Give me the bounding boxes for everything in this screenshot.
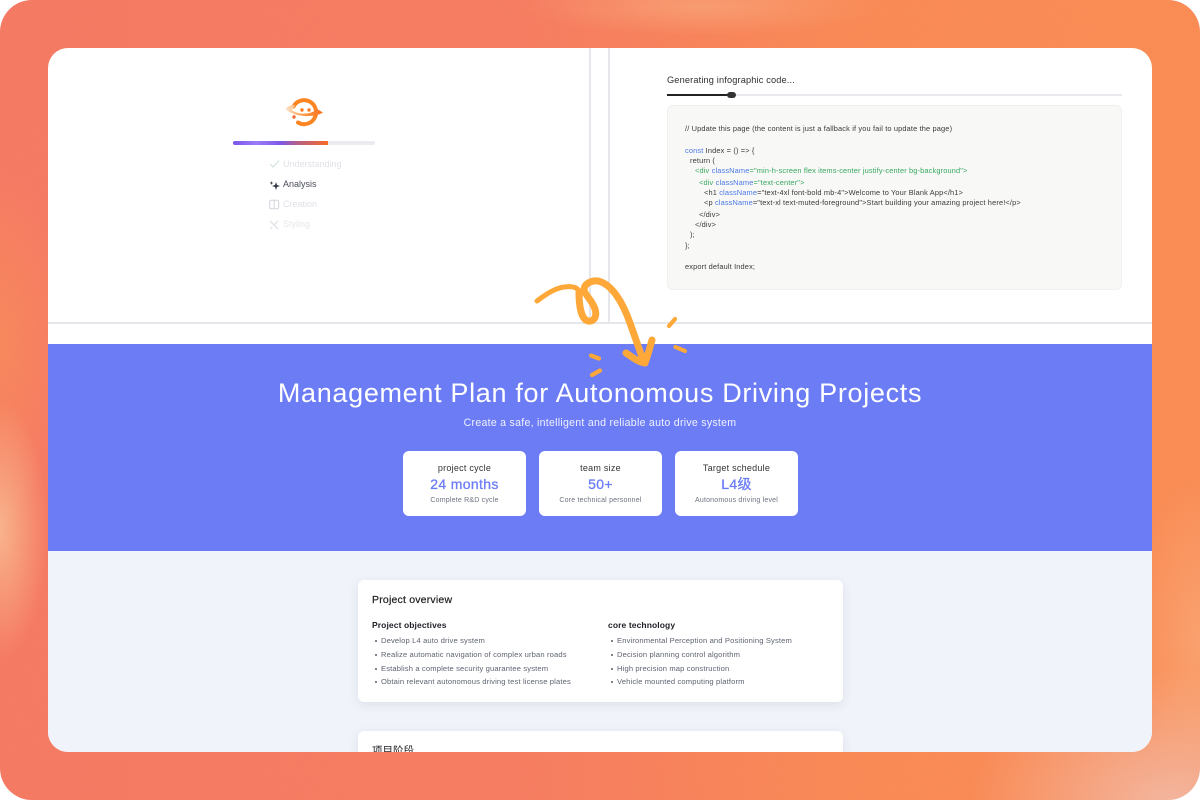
stat card: project cycle: project cycle	[438, 463, 491, 473]
icon: styling	[270, 220, 278, 230]
code progress slider	[667, 92, 1122, 98]
icon: check understanding	[270, 160, 280, 168]
stat card: team size: team size	[580, 463, 621, 473]
list: core technology: Decision planning control algorithm	[617, 650, 740, 659]
list: core technology: core technology	[608, 620, 675, 630]
stat card: project cycle	[403, 451, 526, 516]
icon: creation	[269, 200, 280, 210]
stat card: team size	[539, 451, 662, 516]
panel: project phases (cut off)	[358, 731, 843, 791]
icon: planet logo	[286, 98, 323, 126]
panel: code block: <h1 className="text-4xl font-bold mb-4">Welcome to Your Blank App</h1>	[704, 188, 963, 197]
list: project objectives: Obtain relevant autonomous driving test license plates	[381, 677, 571, 686]
list: project objectives: Realize automatic navigation of complex urban roads	[381, 650, 567, 659]
stat card: project cycle: 24 months	[430, 476, 499, 492]
list: core technology: Environmental Perception and Positioning System	[617, 636, 792, 645]
list: project objectives	[372, 620, 571, 686]
step: Understanding: Understanding	[283, 159, 342, 169]
panel: code block: const Index = () => {	[685, 146, 755, 155]
panel: code block: export default Index;	[685, 262, 755, 271]
panel: code block: };	[685, 241, 690, 250]
panel: code block: <div className="min-h-screen flex items-center justify-center bg-background">	[695, 166, 968, 175]
step: Creation: Creation	[283, 199, 317, 209]
stat card: team size: Core technical personnel	[559, 497, 642, 504]
panel: code block: );	[690, 230, 695, 239]
progress bar	[233, 141, 375, 145]
title: Management Plan for Autonomous Driving Projects	[278, 378, 922, 408]
subtitle: Create a safe, intelligent and reliable auto drive system	[464, 417, 736, 429]
stat card: project cycle: Complete R&D cycle	[430, 497, 499, 504]
list: project objectives: Project objectives	[372, 620, 447, 630]
list: project objectives: Establish a complete security guarantee system	[381, 664, 548, 673]
icon: sparkle analysis	[270, 181, 280, 190]
arrow: hand-drawn orange arrow	[534, 277, 688, 378]
panel: lower content area	[48, 551, 1152, 752]
panel: code block: </div>	[695, 220, 716, 229]
panel: code block: // Update this page (the content is just a fallback if you fail to update the page)	[685, 124, 952, 133]
stat card: team size: 50+	[588, 476, 613, 492]
panel: code block: <p className="text-xl text-muted-foreground">Start building your amazing project here!</p>	[704, 198, 1021, 207]
accent dashes	[591, 319, 685, 375]
panel: loading progress	[233, 98, 375, 145]
panel: code block: return (	[690, 156, 715, 165]
panel: code block	[667, 105, 1122, 290]
step: Analysis: Analysis	[283, 179, 317, 189]
heading: generating code: Generating infographic code...	[667, 75, 795, 85]
list: core technology: Vehicle mounted computing platform	[617, 677, 745, 686]
list: core technology: High precision map construction	[617, 664, 729, 673]
stat card: target schedule: Autonomous driving level	[695, 497, 778, 504]
stat card: target schedule: Target schedule	[703, 463, 770, 473]
panel: blue hero banner	[48, 344, 1152, 551]
list: project objectives: Develop L4 auto drive system	[381, 636, 485, 645]
heading: project overview: Project overview	[372, 594, 452, 606]
stat card: target schedule: L4级	[721, 476, 752, 492]
step: Styling: Styling	[283, 219, 310, 229]
list: core technology	[608, 620, 792, 686]
stat card: target schedule	[675, 451, 798, 516]
panel: project overview	[358, 580, 843, 702]
panel: code block: <div className="text-center">	[699, 178, 805, 187]
panel: code block: </div>	[699, 210, 720, 219]
